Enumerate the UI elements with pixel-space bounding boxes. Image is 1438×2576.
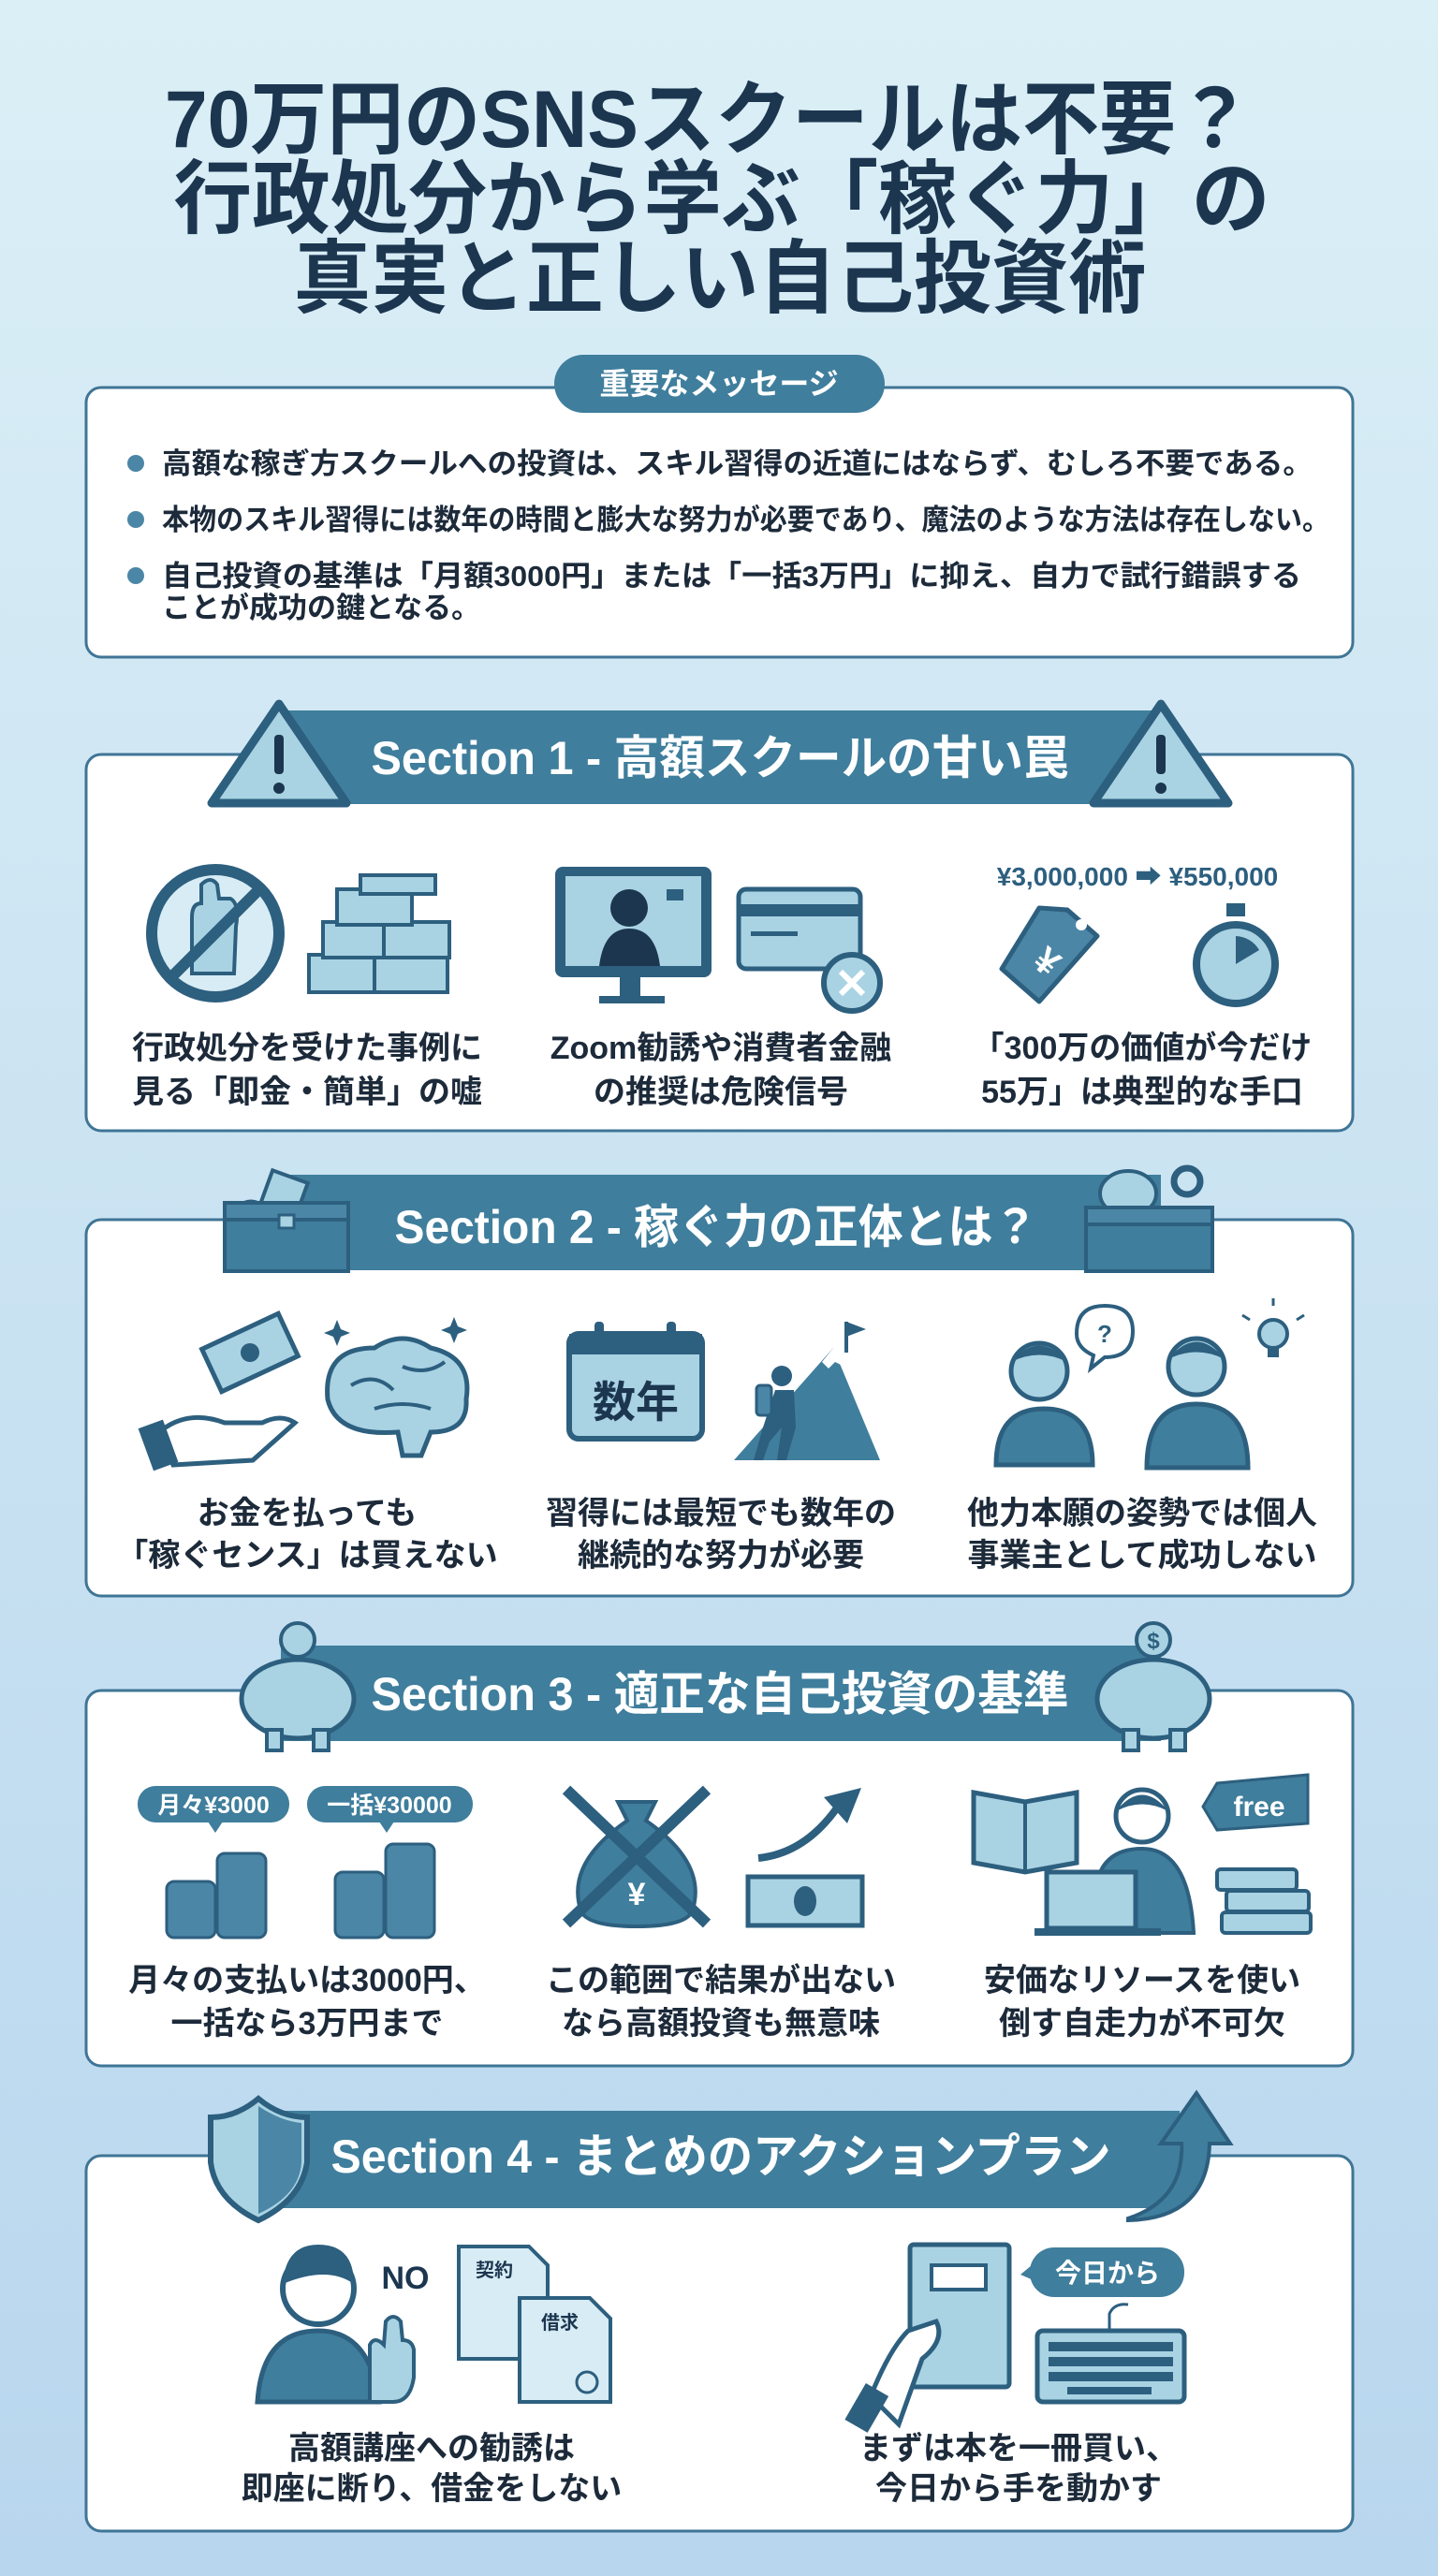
icon: crossed money bag and growth	[566, 1788, 862, 1926]
icon: crossed money bag and growth: ¥	[628, 1877, 646, 1912]
caption: s2 col1: お金を払っても	[198, 1496, 417, 1531]
bullet list: 自己投資の基準は「月額3000円」または「一括3万円」に抑え、自力で試行錯誤する	[162, 560, 1301, 593]
bullet list: ことが成功の鍵となる。	[162, 592, 480, 624]
icon: prohibited hand and money	[152, 870, 449, 997]
caption: s4 col2: 今日から手を動かす	[875, 2471, 1162, 2507]
caption: s2 col2: 習得には最短でも数年の	[546, 1496, 896, 1531]
caption: s3 col3: 安価なリソースを使い	[984, 1963, 1300, 1998]
caption: s4 col1: 即座に断り、借金をしない	[242, 2471, 622, 2507]
banner: section 3	[281, 1646, 1161, 1741]
icon: warning right	[1093, 704, 1228, 803]
caption: s1 col2: の推奨は危険信号	[594, 1075, 848, 1110]
caption: s1 col3: 「300万の価値が今だけ	[973, 1031, 1312, 1066]
icon: piggy bank right: $	[1147, 1629, 1160, 1654]
caption: s1 col3: 55万」は典型的な手口	[981, 1075, 1303, 1110]
title: 70万円のSNSスクールは不要？	[165, 75, 1253, 165]
caption: s1 col2: Zoom勧誘や消費者金融	[550, 1031, 891, 1066]
panel: section 2	[86, 1168, 1353, 1596]
icon: price drop tag and stopwatch	[997, 862, 1278, 1003]
icon: self study resources	[974, 1775, 1311, 1936]
icon: refusing person with contracts: NO	[382, 2261, 429, 2296]
banner: section 4: Section 4 - まとめのアクションプラン	[331, 2130, 1110, 2183]
icon: calendar and climber	[569, 1322, 880, 1460]
icon: piggy bank right	[1097, 1623, 1210, 1750]
icon: toolbox with money	[225, 1170, 348, 1271]
banner: section 3: Section 3 - 適正な自己投資の基準	[371, 1668, 1069, 1720]
caption: s2 col3: 事業主として成功しない	[968, 1538, 1316, 1573]
banner: section 2: Section 2 - 稼ぐ力の正体とは？	[395, 1201, 1037, 1253]
title: 行政処分から学ぶ「稼ぐ力」の	[174, 154, 1269, 244]
bullet list: 本物のスキル習得には数年の時間と膨大な努力が必要であり、魔法のような方法は存在しない。	[162, 504, 1329, 536]
icon: refusing person with contracts	[257, 2245, 610, 2402]
icon: two thinking persons: ?	[1097, 1320, 1112, 1348]
icon: toolbox with brain	[1086, 1168, 1212, 1271]
icon: refusing person with contracts: 契約	[476, 2260, 513, 2281]
banner: section 1	[281, 710, 1161, 804]
banner: section 1: Section 1 - 高額スクールの甘い罠	[371, 732, 1069, 784]
label pill: 重要なメッセージ: 重要なメッセージ	[599, 367, 839, 401]
caption: s4 col2: まずは本を一冊買い、	[859, 2431, 1178, 2466]
icon: price drop tag and stopwatch: ¥3,000,000 ➡ ¥550,000	[997, 862, 1278, 891]
caption: s3 col1: 一括なら3万円まで	[171, 2006, 443, 2042]
panel: section 1	[86, 704, 1353, 1131]
icon: upward arrow	[1128, 2093, 1230, 2220]
caption: s3 col2: この範囲で結果が出ない	[546, 1963, 896, 1998]
icon: coins with budget bubbles: 月々¥3000	[157, 1793, 270, 1819]
icon: price drop tag and stopwatch: ¥	[1025, 940, 1068, 985]
panel: key message	[86, 355, 1353, 657]
panel: section 3	[86, 1623, 1353, 2066]
banner: section 4	[243, 2111, 1180, 2208]
banner: section 2	[281, 1175, 1161, 1270]
icon: book in hand, keyboard, bubble	[844, 2245, 1184, 2433]
icon: refusing person with contracts: 借求	[541, 2312, 579, 2334]
icon: two thinking persons	[996, 1298, 1304, 1468]
icon: warning left	[212, 704, 346, 803]
bullet list	[127, 447, 1329, 624]
icon: piggy bank left	[242, 1623, 354, 1750]
caption: s4 col1: 高額講座への勧誘は	[288, 2431, 575, 2466]
label pill: 重要なメッセージ	[554, 355, 885, 413]
bullet list: 高額な稼ぎ方スクールへの投資は、スキル習得の近道にはならず、むしろ不要である。	[162, 447, 1313, 480]
icon: hand money brain	[139, 1313, 467, 1471]
caption: s3 col1: 月々の支払いは3000円、	[128, 1963, 486, 1998]
caption: s1 col1: 見る「即金・簡単」の嘘	[132, 1075, 482, 1110]
panel: section 4	[86, 2093, 1353, 2531]
icon: coins with budget bubbles	[138, 1786, 473, 1938]
icon: zoom monitor and credit card	[555, 867, 880, 1011]
icon: shield	[211, 2099, 307, 2220]
title: 真実と正しい自己投資術	[294, 234, 1146, 324]
icon: book in hand, keyboard, bubble: 今日から	[1055, 2259, 1160, 2288]
icon: coins with budget bubbles: 一括¥30000	[327, 1793, 452, 1819]
caption: s2 col3: 他力本願の姿勢では個人	[967, 1496, 1317, 1531]
caption: s2 col1: 「稼ぐセンス」は買えない	[116, 1538, 498, 1573]
caption: s2 col2: 継続的な努力が必要	[578, 1537, 864, 1573]
caption: s3 col2: なら高額投資も無意味	[562, 2006, 880, 2042]
title	[165, 75, 1269, 324]
icon: calendar and climber: 数年	[593, 1378, 679, 1427]
caption: s3 col3: 倒す自走力が不可欠	[999, 2005, 1285, 2042]
icon: self study resources: free	[1233, 1792, 1285, 1822]
caption: s1 col1: 行政処分を受けた事例に	[132, 1031, 482, 1066]
